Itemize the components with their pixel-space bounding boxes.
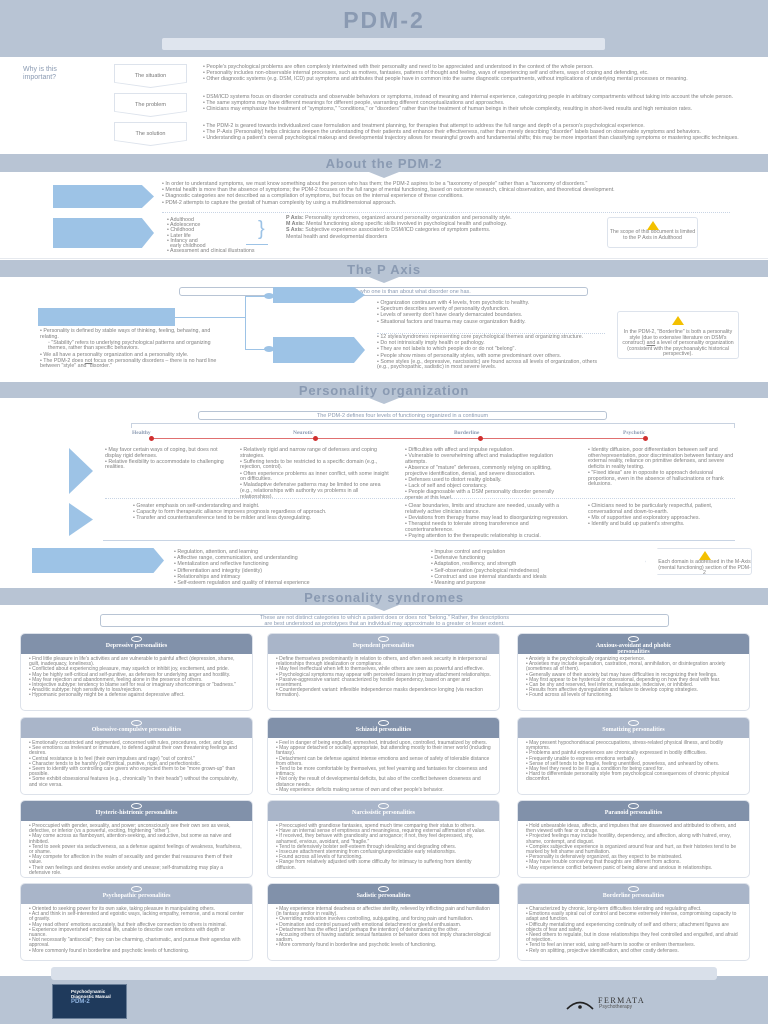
age list: • Assessment and clinical illustrations [167, 248, 255, 254]
card: dependent: • May feel ineffectual when left to themselves, while others are seen as powerful and effective. [276, 666, 484, 672]
panel: p axis [38, 287, 739, 370]
style text: • Some styles (e.g., depressive, narcissistic) are found across all levels of organization, others (e.g., psychopathic, sadistic) in most severe levels. [377, 359, 597, 370]
why label: Why is this [23, 66, 57, 73]
card: hysteric-histrionic: • May come across as flamboyant, attention-seeking, and seductive, but some as naive and inhibited. [29, 833, 231, 845]
age list [167, 217, 255, 254]
card: sadistic: • Detachment has the effect (and perhaps the intention) of dehumanizing the other. [276, 927, 459, 933]
card: paranoid [517, 800, 750, 878]
style text [377, 334, 597, 370]
connector [175, 317, 245, 318]
chevron 1 [69, 448, 93, 494]
panel: organization levels: • Mix of supportive and exploratory approaches. [588, 515, 700, 521]
warning box [607, 217, 698, 248]
panel: organization levels: • Therapist needs to tolerate strong transference and countertransference. [405, 521, 529, 533]
header band [0, 0, 768, 57]
panel: organization levels: • Relatively rigid and narrow range of defenses and coping strategies. [240, 447, 377, 459]
card: schizoid [267, 717, 500, 795]
panel: organization levels: • Defenses used to distort reality globally. [405, 477, 502, 483]
capacities list 2: • Meaning and purpose [431, 580, 486, 586]
card: narcissistic [267, 800, 500, 878]
warning box: The scope of this document is limited to the P Axis in Adulthood [610, 229, 695, 241]
band: personality organization [0, 382, 768, 398]
style text: • 12 styles/syndromes representing core psychological themes and organizing structure. [377, 334, 583, 340]
card: obsessive-compulsive: • Seem to identify with controlling care givers who expected them to be "more grown-up" than possible. [29, 766, 235, 777]
logo: fermata: FERMATA [598, 996, 645, 1005]
card: anxious-avoidant: • Results from affective dysregulation and failure to develop coping strategies. [526, 687, 698, 693]
card: borderline: • Tend to feel an inner void, using self-harm to soothe or enliven themselves. [526, 942, 695, 948]
card: narcissistic: Narcissistic personalities [352, 810, 415, 816]
card: paranoid: • May have trouble conceiving that thoughts are different from actions. [526, 859, 681, 865]
footer [0, 976, 768, 1024]
card: schizoid: Schizoid personalities [356, 727, 411, 733]
panel: organization levels: • Identify and build up patient's strengths. [588, 521, 685, 527]
card: somatizing: Somatizing personalities [602, 727, 665, 733]
card: depressive: • May be highly self-critical and self-punitive, as defenses for underlying anger and hostility. [29, 672, 230, 678]
card: sadistic: • May experience internal deadness or affective sterility, relieved by inflicting pain and humiliation (in fantasy and/or in reality). [276, 906, 490, 917]
organization text: • Spectrum describes severity of personality dysfunction. [377, 306, 510, 312]
level labels: Healthy [132, 430, 151, 436]
card: obsessive-compulsive: • Central resistance is to feel (their own impulses and rage) "out of control." [29, 756, 195, 762]
quote: Personality is more about who one is than about what disorder one has. [296, 289, 471, 295]
left text: ◦ "Stability" refers to underlying psychological patterns and organizing themes, rather than specific behaviors. [48, 340, 211, 351]
card: schizoid: • Not only the result of developmental deficits, but also of the conflict between closeness and distance needs. [276, 776, 481, 788]
left text: • Personality is defined by stable ways of thinking, feeling, behaving, and relating. [40, 328, 210, 340]
card: borderline: • Need others to regulate, but in close relationships they feel controlled and engulfed, and afraid of rejection. [526, 932, 738, 943]
text: situation: • Personality includes non-observable internal processes, such as motives, fantasies, patterns of thought and feeling, ways of experiencing self and others, ways of coping and defending, etc. [203, 70, 649, 76]
book cover [52, 984, 127, 1019]
organization text: • Situational factors and trauma may cause organization fluidity. [377, 319, 526, 325]
brace: } [258, 218, 265, 240]
card: depressive: • Hypomanic personality might be a defense against depressive affect. [29, 692, 185, 698]
card: depressive: Depressive personalities [106, 643, 167, 649]
card: dependent: • Passive-aggressive variant: characterized by hostile dependency, based on anger and resentment. [276, 677, 470, 688]
arrow [246, 244, 268, 245]
band: personality syndromes: Personality syndromes [304, 590, 464, 605]
why label [23, 66, 57, 80]
capacities list 1: • Relationships and intimacy [174, 574, 240, 580]
card: borderline: • Characterized by chronic, long-term difficulties tolerating and regulating affect. [526, 906, 702, 912]
card: borderline: Borderline personalities [603, 893, 664, 899]
axes text: M Axis: Mental functioning along specific skills involved in psychological health and pathology. [286, 221, 507, 227]
capacities list 2: • Defensive functioning [431, 555, 485, 561]
card: anxious-avoidant: Anxious-avoidant and phobic [596, 643, 671, 649]
chevron: the problem: The problem [135, 102, 166, 108]
card: sadistic [267, 883, 500, 961]
box: style [273, 337, 365, 363]
left blue rect [38, 308, 175, 326]
card: sadistic: Sadistic personalities [357, 893, 410, 899]
card: somatizing: • Sense of self tends to be fragile, feeling unentitled, powerless, and unheard by others. [526, 761, 719, 767]
organization text [377, 300, 529, 325]
card: depressive: • Anaclitic subtype: high sensitivity to loss/rejection. [29, 687, 142, 693]
card: somatizing: • May present hypochondriacal preoccupations, stress-related physical illness, and bodily symptoms. [526, 740, 723, 751]
band: personality organization: Personality organization [299, 383, 469, 398]
age list: • Childhood [167, 227, 194, 233]
axes text [286, 215, 512, 240]
capacities list 2: • Self-observation (psychological mindedness) [431, 568, 539, 574]
section: why is this important [23, 64, 739, 146]
card: psychopathic: • Act and think in self-interested and egoistic ways, lacking empathy, remorse, and a moral center of gravity. [29, 911, 244, 922]
chevron: the problem [114, 93, 187, 117]
card: borderline [517, 883, 750, 961]
panel: organization levels: Psychotic [623, 430, 645, 436]
book cover: Psychodynamic [71, 989, 105, 994]
card: somatizing: • May feel they need to be ill as a condition for being cared for. [526, 766, 664, 772]
card: psychopathic: Psychopathic personalities [103, 893, 170, 899]
card: psychopathic: • Experience impoverished emotional life, unable to describe own emotions with depth or nuance. [29, 927, 225, 938]
text: solution: • Understanding a patient's overall psychological makeup and developmental trajectory allows for meaningful growth and fundamental shifts; this may be more important than classifying symptoms or mastering specific techniques. [203, 135, 739, 141]
about text: • Diagnostic categories are not described as a compilation of symptoms, but focus on the internal experience of these conditions. [162, 193, 464, 199]
age list: • Later life [167, 233, 191, 239]
style text: • Do not intrinsically imply health or pathology. [377, 340, 485, 346]
age list: early childhood [170, 243, 206, 249]
card: depressive: • Introjective subtype: tendency to blame self for real or imaginary shortcomings or "badness." [29, 682, 236, 688]
card: dependent: • Define themselves predominantly in relation to others, and often seek security in interpersonal relationships through idealization or compliance. [276, 656, 487, 667]
logo: fermata [566, 996, 645, 1010]
capacities list 2: • Impulse control and regulation [431, 549, 505, 555]
chevron: the solution [114, 122, 187, 146]
band: about the pdm-2 [0, 154, 768, 172]
card: dependent: Dependent personalities [353, 643, 414, 649]
card: schizoid: • Tend to be more comfortable by themselves, yet feel yearning and fantasies for closeness and intimacy. [276, 766, 487, 777]
panel: organization levels: Borderline [454, 430, 479, 436]
card: depressive: • May fear rejection and abandonment, feeling alone in the presence of others. [29, 677, 203, 683]
bracket [131, 423, 735, 428]
card: sadistic: • Accusing others of having sadistic sexual fantasies or behavior does not imply characterological sadism. [276, 932, 491, 943]
panel: organization levels: • Maladaptive defensive patterns may be limited to one area (e.g., relationships with authority vs problems in all relationships). [240, 482, 381, 500]
title: PDM-2 [343, 7, 425, 33]
book cover: PDM-2 [71, 999, 90, 1005]
panel: organization levels: • People diagnosable with a DSM personality disorder generally operate at this level. [405, 489, 554, 501]
card: dependent: • Counterdependent variant: inflexible independence masks dependence longing (via reaction formation). [276, 687, 483, 698]
card: depressive [20, 633, 253, 711]
card: anxious-avoidant: personalities [617, 649, 650, 655]
card: obsessive-compulsive [20, 717, 253, 795]
band: the p axis [0, 260, 768, 277]
quote: prototypes: are best understood as prototypes that an individual may approximate to a greater or lesser extent. [264, 621, 505, 627]
capacities list 2: • Adaptation, resiliency, and strength [431, 561, 516, 567]
card: paranoid: • Projected feelings may include hostility, dependency, and affection, along with hatred, envy, shame, contempt, and disgust. [526, 833, 731, 845]
text: problem: • Clinicians may emphasize the treatment of "symptoms," "conditions," or "disorders" rather than the treatment of human beings in their whole complexity, resulting in short-lived results and high remission rates. [203, 106, 692, 112]
card: psychopathic: • May read others' emotions accurately, but their affective connection to others is minimal. [29, 922, 227, 928]
card: obsessive-compulsive: • Emotionally constricted and regimented, concerned with rules, procedures, order, and logic. [29, 740, 234, 746]
card: narcissistic: • Insecure attachment stemming from confusing/unpredictable early relationships. [276, 849, 456, 855]
age list: • Infancy and [167, 238, 198, 244]
treatment descriptions: • Capacity to form therapeutic alliance improves prognosis regardless of approach. [133, 509, 327, 515]
text: solution: • The P-Axis (Personality) helps clinicians deepen the understanding of their patients and enhance their effectiveness, rather than merely describing "disorder" labels based on observable symptoms and behaviors. [203, 129, 701, 135]
chevron: the solution: The solution [136, 131, 165, 137]
card: anxious-avoidant: • Found across all levels of functioning. [526, 692, 613, 698]
panel: organization levels: • Vulnerable to overwhelming affect and maladaptive regulation attempts. [405, 453, 553, 465]
book cover: Diagnostic Manual [71, 994, 111, 999]
left text: • The PDM-2 does not focus on personality disorders – there is no hard line between "style" and "disorder." [40, 358, 216, 369]
chevron: the situation [114, 64, 187, 88]
panel: organization levels: • Suffering tends to be restricted to a specific domain (e.g., rejection, control). [240, 459, 377, 470]
card: hysteric-histrionic: • Tend to seek power via seductiveness, as a defense against feelings of weakness, fearfulness, or shame. [29, 844, 242, 855]
capacities list 1 [174, 549, 310, 586]
quote [198, 411, 607, 420]
panel: organization levels [32, 411, 752, 586]
panel: organization levels: Neurotic [293, 430, 313, 436]
panel: organization levels: • Deviations from therapy frame may lead to disorganizing regression. [405, 515, 568, 521]
card: schizoid: • May experience deficits making sense of own and other people's behavior. [276, 787, 444, 793]
capacities list 1: • Regulation, attention, and learning [174, 549, 258, 555]
panel: organization levels: • Clinicians need to be particularly respectful, patient, conversational and down-to-earth. [588, 503, 712, 515]
card: psychopathic: • Not necessarily "antisocial"; they can be charming, charismatic, and pursue their agendas with approval. [29, 937, 241, 948]
card: borderline: • Emotions easily spiral out of control and become extremely intense, compromising capacity to adapt and function. [526, 911, 736, 922]
card: somatizing: • Problems and painful experiences are chronically expressed in bodily difficulties. [526, 750, 707, 756]
panel: organization levels: • Absence of "mature" defenses, commonly relying on splitting, projective identification, denial, and severe dissociation. [405, 465, 552, 477]
level descriptions: • May favor certain ways of coping, but does not display rigid defenses. [105, 447, 218, 459]
about text: • Mental health is more than the absence of symptoms; the PDM-2 focuses on the full range of mental functioning, based on outcome research, clinical observation, and theoretical development. [162, 187, 615, 193]
card: paranoid: • Complex subjective experience is organized around fear and hurt, as their histories tend to be marked by felt shame and humiliation. [526, 844, 736, 855]
card: obsessive-compulsive: Obsessive-compulsive personalities [92, 727, 181, 733]
card: paranoid: Paranoid personalities [605, 810, 662, 816]
why label: important? [23, 74, 56, 80]
panel: organization levels: • Paying attention to the therapeutic relationship is crucial. [405, 533, 541, 539]
card: narcissistic: • Preoccupied with grandiose fantasies, spend much time comparing their status to others. [276, 823, 476, 829]
card: narcissistic: • If received, they behave with grandiosity and arrogance; if not, they feel depressed, shy, ashamed, envious, avoidant, and "fragile." [276, 833, 473, 845]
card: anxious-avoidant [517, 633, 750, 711]
chevron 2 [69, 503, 93, 536]
axes text: Mental health and developmental disorders [286, 234, 387, 240]
card: anxious-avoidant: • Can be shy and reserved, feel inferior, inadequate, indecisive, or inhibited. [526, 682, 693, 688]
warning: M axis [645, 548, 752, 575]
box: organization [273, 287, 365, 303]
warning: M axis: Each domain is addressed in the M-Axis (mental functioning) section of the PDM-2 [658, 559, 751, 576]
age list: • Adolescence [167, 222, 200, 228]
footer light bar [51, 967, 717, 980]
organization text: • Levels of severity don't have clearly demarcated boundaries. [377, 312, 522, 318]
style text: • They are not labels to which people do or do not "belong". [377, 346, 516, 352]
band: personality syndromes [0, 588, 768, 605]
card: sadistic: • More commonly found in borderline and psychotic levels of functioning. [276, 942, 436, 948]
about text: • PDM-2 attempts to capture the gestalt of human complexity by using a multidimensional approach. [162, 200, 396, 206]
card: anxious-avoidant: • Anxieties may include separation, castration, moral, annihilation, or disintegration anxiety (sometimes all of them). [526, 661, 725, 672]
panel: organization levels: • Often experience problems as inner conflict, with some insight on difficulties. [240, 471, 389, 482]
card: narcissistic: • Range from relatively adjusted with some difficulty for intimacy to suffering from identity diffusion. [276, 859, 472, 871]
blue box: mental functioning [32, 548, 164, 573]
card: dependent [267, 633, 500, 711]
blue arrow box 2 [53, 218, 154, 248]
level descriptions: • Relative flexibility to accommodate to challenging realities. [105, 459, 224, 470]
card: psychopathic: • More commonly found in borderline and psychotic levels of functioning. [29, 948, 189, 954]
age list: • Adulthood [167, 217, 194, 223]
treatment descriptions: • Transfer and countertransference tend to be milder and less dysregulating. [133, 515, 311, 521]
card: schizoid: • May appear detached or socially appropriate, but attending mostly to their inner world (including fantasy). [276, 745, 491, 756]
quote [179, 287, 588, 296]
card: narcissistic: • Tend to defensively bolster self-esteem through idealizing and degrading others. [276, 844, 456, 850]
card: schizoid: • Detachment can be defense against intense emotions and sense of safety of tolerable distance from others. [276, 756, 489, 767]
red continuum line [151, 438, 646, 439]
card: obsessive-compulsive: • Some exhibit obsessional features (e.g., chronically "in their heads") without the compulsivity, and vice versa. [29, 776, 238, 788]
card: psychopathic [20, 883, 253, 961]
warning: borderline: In the PDM-2, "Borderline" is both a personality style (due to extensive literature on DSM's construct) and a level of personality organization (consistent with the psychoanalytic historical perspective). [622, 329, 734, 357]
panel: about content [53, 181, 730, 254]
card: somatizing [517, 717, 750, 795]
capacities list 2 [431, 549, 547, 586]
left text [40, 328, 216, 369]
card: borderline: • Rely on splitting, projective identification, and other costly defenses. [526, 948, 679, 954]
text: problem: • The same symptoms may have different meanings for different people, warranting different conceptualizations and approaches. [203, 100, 504, 106]
card: dependent: • Psychological symptoms may appear with perceived issues in primary attachment relationships. [276, 672, 491, 678]
card: hysteric-histrionic: • May compete for affection in the realm of sexuality and gender that reassures them of their value. [29, 854, 232, 865]
about text: • In order to understand symptoms, we must know something about the person who has them; the PDM-2 aspires to be a "taxonomy of people" rather than a "taxonomy of disorders." [162, 181, 587, 187]
panel: organization levels: • Clear boundaries, limits and structure are needed, usually with a relatively active clinician stance. [405, 503, 559, 515]
axes text: S Axis: Subjective experience associated to DSM/ICD categories of symptom patterns. [286, 227, 490, 233]
card: anxious-avoidant: • Generally aware of their anxiety but may have difficulties in recognizing their feelings. [526, 672, 717, 678]
text: situation: • People's psychological problems are often complexly intertwined with their personality and need to be appreciated and understood in the context of the whole person. [203, 64, 594, 70]
card: paranoid: • Personality is defensively organized, as they expect to be mistreated. [526, 854, 682, 860]
capacities list 1: • Differentiation and integrity (identity) [174, 568, 262, 574]
card: paranoid: • May experience conflict between panic of being alone and anxious in relationships. [526, 865, 712, 871]
capacities list 1: • Mentalization and reflective functioning [174, 561, 269, 567]
card: obsessive-compulsive: • Character tends to be harshly (self)critical, punitive, rigid, and perfectionistic. [29, 761, 201, 767]
card: depressive: • Conflicted about experiencing pleasure, may squelch or inhibit joy, excitement, and pride. [29, 666, 229, 672]
capacities list 1: • Affective range, communication, and understanding [174, 555, 298, 561]
quote: prototypes [100, 614, 669, 627]
panel: organization levels: • Lack of self and object constancy. [405, 483, 487, 489]
card: hysteric-histrionic: • Their own feelings and desires evoke anxiety and unease; self-dramatizing may play a defensive role. [29, 865, 223, 876]
text: solution: • The PDM-2 is geared towards individualized case formulation and treatment planning, for therapies that attempt to address the full range and depth of a person's psychological experience. [203, 123, 645, 129]
level descriptions [105, 447, 224, 470]
card: hysteric-histrionic: • Preoccupied with gender, sexuality, and power; unconsciously see their own sex as weak, defective, or inferior (vs a powerful, exciting, frightening "other"). [29, 823, 230, 834]
band: the p axis: The P Axis [347, 262, 421, 277]
card: hysteric-histrionic [20, 800, 253, 878]
blue arrow box 1 [53, 185, 154, 208]
card: depressive: • Find little pleasure in life's activities and are vulnerable to painful affect (depression, shame, guilt, inadequacy, loneliness). [29, 656, 235, 667]
card: narcissistic: • Found across all levels of functioning. [276, 854, 363, 860]
card: anxious-avoidant: • Anxiety is the psychologically organizing experience. [526, 656, 645, 662]
quote: The PDM-2 defines four levels of functioning organized in a continuum [317, 413, 488, 419]
style text: • People show mixes of personality styles, with some predominant over others. [377, 353, 561, 359]
warning: borderline [617, 311, 739, 359]
card: schizoid: • Feel in danger of being engulfed, enmeshed, intruded upon, controlled, traumatized by others. [276, 740, 487, 746]
card: somatizing: • Frequently unable to express emotions verbally. [526, 756, 635, 762]
panel: organization levels: • Identity diffusion, poor differentiation between self and other/representation, poor discrimination between fantasy and external reality, reliance on primitive defenses, and severe deficits in reality testing. [588, 447, 733, 470]
text: situation: • Other diagnostic systems (e.g. DSM, ICD) put symptoms and attributes that people have in common into the same diagnostic compartments, without implications of underlying mental processes or meaning. [203, 76, 688, 82]
text: situation [203, 64, 688, 82]
band: about the pdm-2: About the PDM-2 [326, 156, 442, 171]
logo: fermata: Psychotherapy [599, 1004, 632, 1010]
card: somatizing: • Hard to differentiate personality style from psychological consequences of chronic physical discomfort. [526, 771, 729, 782]
card: sadistic: • Overriding motivation involves controlling, subjugating, and forcing pain and humiliation. [276, 916, 473, 922]
card: borderline: • Difficulty mentalizing and experiencing continuity of self and others; attachment figures are objects of fear and safety. [526, 922, 729, 933]
text: problem: • DSM/ICD systems focus on disorder constructs and observable behaviors or symptoms, instead of meaning and internal experience, categorizing people in arbitrary compartments without taking into account the whole person. [203, 94, 733, 100]
card: paranoid: • Hold unbearable ideas, affects, and impulses that are disavowed and attributed to others, and then viewed with fear or outrage. [526, 823, 736, 834]
chevron: the situation: The situation [135, 73, 166, 79]
text: problem [203, 94, 733, 112]
card: sadistic: • Domination and control pursued with emotional detachment or gleeful enthusiasm. [276, 922, 461, 928]
about text [162, 181, 615, 206]
axes text: P Axis: Personality syndromes, organized around personality organization and personality style. [286, 215, 512, 221]
capacities list 1: • Self-esteem regulation and quality of internal experience [174, 580, 310, 586]
panel: organization levels: • "Fixed ideas" are in opposite to approach delusional proportions, even in the absence of hallucinations or frank delusions. [588, 470, 724, 487]
quote: prototypes: These are not distinct categories to which a patient does or does not "belong." Rather, the descriptions [260, 615, 509, 621]
text: solution [203, 123, 739, 141]
capacities list 2: • Construct and use internal standards and ideals [431, 574, 547, 580]
subtitle bar [162, 38, 605, 50]
card: obsessive-compulsive: • See emotions as irrelevant or immature, to defend against their own threatening feelings and desires. [29, 745, 237, 756]
card: psychopathic: • Oriented to seeking power for its own sake, taking pleasure in manipulating others. [29, 906, 215, 912]
treatment descriptions: • Greater emphasis on self-understanding and insight. [133, 503, 259, 509]
organization text: • Organization continuum with 4 levels, from psychotic to healthy. [377, 300, 529, 306]
panel: organization levels: • Difficulties with affect and impulse regulation. [405, 447, 514, 453]
left text: • We all have a personality organization and a personality style. [40, 352, 188, 358]
card: anxious-avoidant: • May first appear to be hysterical or obsessional, depending on how they deal with fear. [526, 677, 720, 683]
card: hysteric-histrionic: Hysteric-histrionic personalities [96, 810, 177, 816]
treatment descriptions [133, 503, 327, 521]
card: narcissistic: • Have an internal sense of emptiness and meaningless, requiring external affirmation of value. [276, 828, 486, 834]
